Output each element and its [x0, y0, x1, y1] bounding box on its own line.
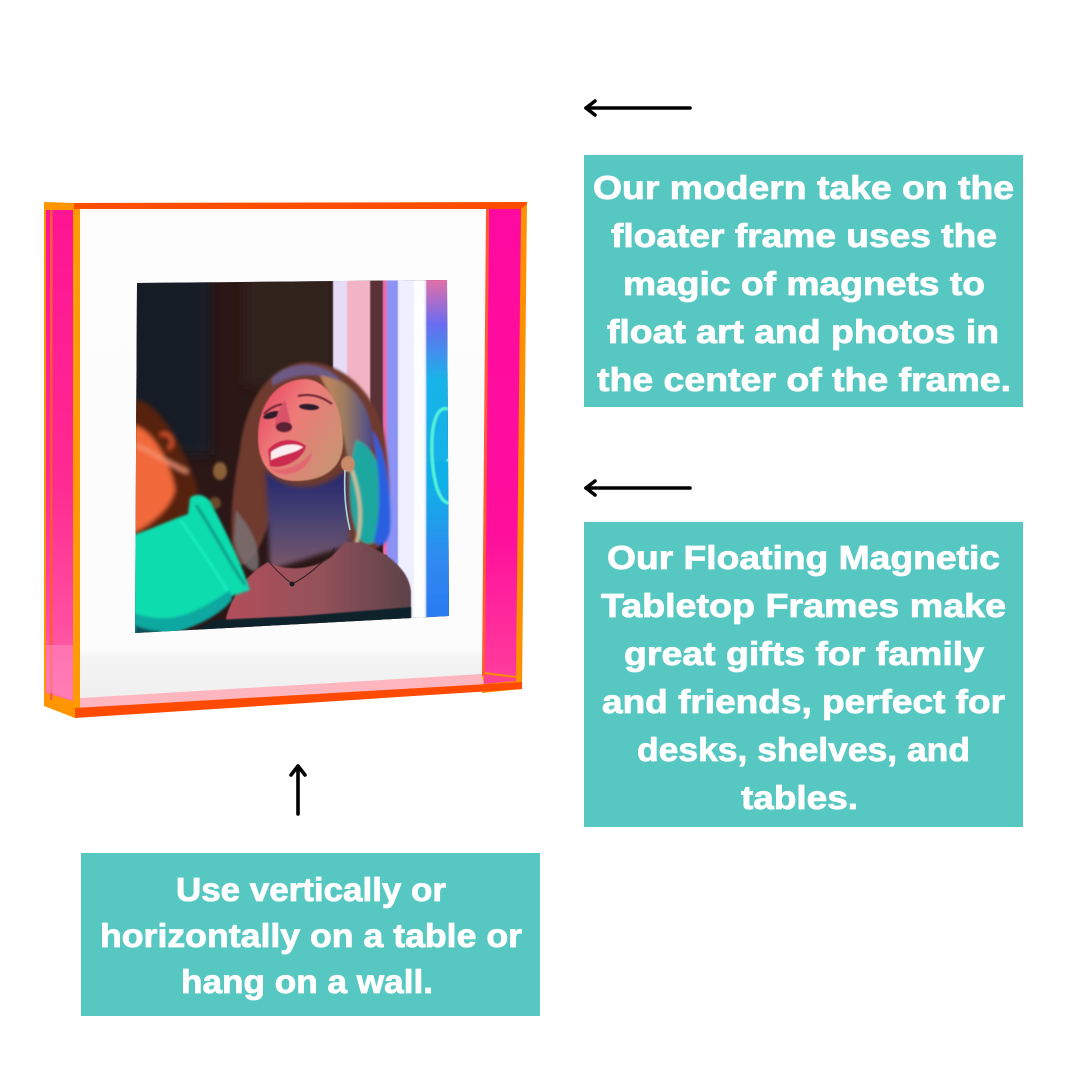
photo background: dark room	[130, 275, 455, 640]
callout: modern floater frame	[584, 155, 1023, 407]
callout text: Our Floating Magnetic	[607, 539, 1000, 576]
frame: pink floor reflection	[80, 674, 484, 709]
frame: left acrylic side panel	[44, 202, 75, 718]
callout text: great gifts for family	[624, 635, 985, 672]
photo: blurred foreground head	[130, 400, 198, 545]
callout text: Our modern take on the	[593, 169, 1014, 206]
callout text	[601, 539, 1006, 816]
callout text: desks, shelves, and	[637, 731, 970, 768]
photo: earring	[345, 470, 350, 530]
callout text	[593, 169, 1014, 398]
callout text: horizontally on a table or	[100, 917, 522, 954]
photo: woman's neck	[266, 470, 350, 570]
photo: blurred bokeh lights	[209, 462, 227, 509]
hair back mass	[231, 362, 390, 566]
callout: vertical or horizontal use	[81, 853, 540, 1016]
photo: ear	[341, 456, 355, 472]
frame: front orange left post	[74, 209, 80, 710]
hair: teal dyed lengths	[350, 440, 385, 544]
photo: woman's face	[258, 379, 343, 481]
photo: woman's shoulders and chest	[226, 542, 411, 628]
callout text: float art and photos in	[607, 313, 999, 350]
product photo: neon acrylic floating frame	[44, 202, 527, 718]
frame: top edge	[74, 202, 527, 209]
photo: necklace	[264, 548, 335, 584]
photo background: window and neon wall	[333, 275, 450, 625]
photo: neon heart sign	[432, 409, 452, 503]
frame: right acrylic side panel	[482, 202, 527, 693]
photo: facial features	[262, 395, 332, 474]
callout text: hang on a wall.	[181, 963, 433, 1000]
arrow: pointing up to frame	[291, 766, 305, 814]
hair: violet crown	[272, 365, 342, 386]
callout text	[100, 871, 522, 1000]
hair: blue highlight	[372, 430, 390, 545]
callout text: and friends, perfect for	[602, 683, 1005, 720]
callout text: Use vertically or	[176, 871, 446, 908]
frame: white mat board	[80, 209, 487, 698]
hair: blonde strand	[352, 470, 360, 545]
callout text: tables.	[741, 779, 858, 816]
photo print on mat	[125, 275, 455, 645]
callout: great gifts	[584, 522, 1023, 827]
arrow: pointing to frame middle	[586, 481, 690, 495]
callout text: floater frame uses the	[611, 217, 997, 254]
callout text: the center of the frame.	[597, 361, 1011, 398]
hair: right blonde section	[319, 374, 374, 458]
photo: black top	[194, 606, 412, 630]
photo: blurred green foreground shoulder	[130, 495, 250, 640]
arrow: pointing to frame top	[586, 101, 690, 115]
callout text: magic of magnets to	[623, 265, 985, 302]
callout text: Tabletop Frames make	[601, 587, 1006, 624]
frame: bottom red edge	[75, 682, 522, 718]
hair: left lower strands	[234, 510, 259, 571]
photo: necklace pendant	[290, 582, 294, 586]
frame: front orange right post	[482, 209, 489, 676]
photo: woman's hair	[231, 362, 390, 571]
